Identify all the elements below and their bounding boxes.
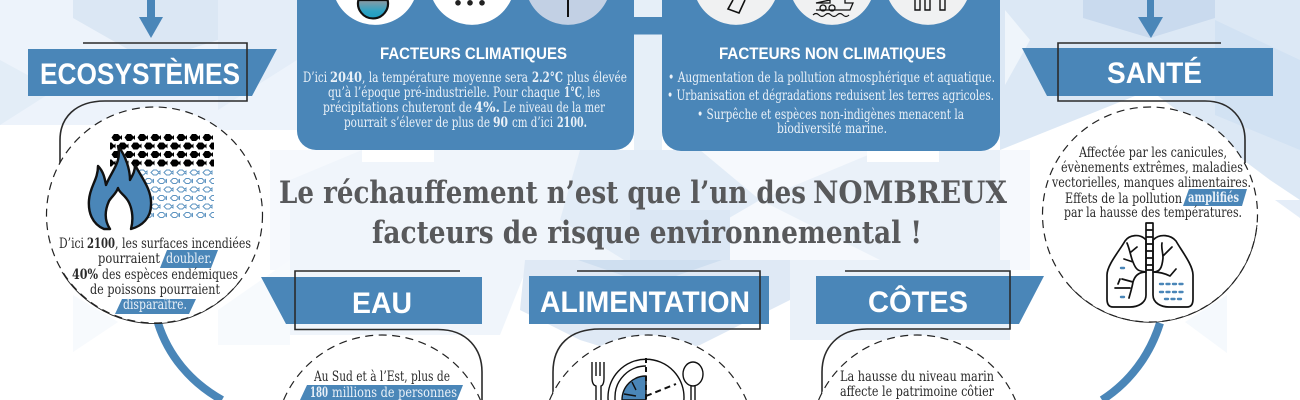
dashed circle (1042, 107, 1258, 322)
arrow: to ecosystems (139, 0, 163, 38)
panel: facteurs non climatiques (662, 0, 1000, 151)
text block: 40% (72, 267, 98, 283)
text block: non climate facts (667, 70, 995, 137)
text block: climate facts: Le niveau de la mer (503, 100, 605, 116)
text block: climate facts: 90 (493, 115, 508, 131)
text block: climate facts: pourrait s’élever de plus de (344, 115, 490, 131)
dashed circle (46, 107, 262, 324)
text block: climate facts: , la température moyenne sera (362, 70, 528, 86)
text block: Effets de la pollution (1065, 191, 1182, 207)
section: cotes (816, 271, 1044, 400)
text block: amplifiés (1188, 190, 1239, 206)
text block: par la hausse des températures. (1064, 205, 1242, 221)
text block: non climate facts: • Urbanisation et dégradations reduisent les terres agricoles. (667, 88, 994, 104)
text block: climate facts: 2100. (557, 115, 587, 131)
icon: fish pattern (110, 133, 214, 219)
banner title: SANTÉ (1107, 56, 1202, 90)
title: facteurs de risque environnemental ! (372, 215, 922, 251)
text block: climate facts: 2040 (330, 70, 362, 86)
icon: thermometer (529, 0, 607, 25)
text block: climate facts: , les (582, 85, 600, 101)
dashed circle (550, 335, 746, 400)
dashed circle (819, 335, 1015, 400)
text block: D’ici (59, 236, 85, 252)
text block: climate facts: cm d’ici (512, 115, 554, 131)
text block: climate facts: 1°C (564, 85, 582, 101)
heading: FACTEURS CLIMATIQUES (380, 45, 567, 63)
heading: FACTEURS NON CLIMATIQUES (719, 45, 946, 63)
icon: flame (89, 146, 151, 229)
text block: climate facts: plus élevée (567, 70, 627, 86)
text block (840, 369, 994, 400)
icon: plate clock with cutlery (592, 358, 703, 400)
text block: non climate facts: biodiversité marine. (777, 121, 887, 137)
icon: factory (889, 0, 967, 25)
text block: de poissons pourraient (90, 282, 220, 298)
banner outline (822, 271, 1010, 400)
section: alimentation (529, 271, 769, 400)
text block: Au Sud et à l’Est, plus de (313, 369, 450, 385)
icon: ship (793, 0, 871, 25)
banner (28, 49, 277, 96)
dashed circle (284, 335, 480, 400)
text block: non climate facts: • Surpêche et espèces non-indigènes menacent la (697, 107, 964, 123)
text block: climate facts: 4%. (474, 100, 500, 116)
title: NOMBREUX (813, 175, 1008, 211)
text block: vectorielles, manques alimentaires. (1051, 175, 1251, 191)
curved link: right (1102, 323, 1160, 400)
banner outline (60, 43, 247, 163)
banner title: EAU (352, 287, 412, 320)
banner (261, 277, 482, 324)
text block (300, 369, 463, 400)
text block (59, 236, 251, 314)
text block: climate facts: 2.2°C (532, 70, 563, 86)
banner title: ECOSYSTÈMES (40, 57, 240, 91)
text block: des espèces endémiques (102, 267, 238, 283)
icon: lungs (1107, 223, 1193, 307)
banner title: CÔTES (868, 285, 968, 319)
banner title: ALIMENTATION (540, 286, 750, 319)
section: eau (261, 271, 482, 400)
text block: pourraient (98, 251, 160, 267)
text block: disparaître. (123, 297, 187, 313)
panel: facteurs climatiques (297, 0, 634, 150)
arrow: to health (1138, 0, 1163, 38)
banner (816, 276, 1044, 324)
icon: water drop eye (336, 0, 414, 25)
text block (1051, 145, 1251, 221)
text block: La hausse du niveau marin (840, 369, 994, 385)
text block: non climate facts: • Augmentation de la pollution atmosphérique et aquatique. (668, 70, 995, 86)
title (279, 175, 1008, 251)
connector between panels (630, 17, 666, 34)
section: ecosystemes (28, 43, 277, 324)
text block: évènements extrêmes, maladies (1061, 160, 1243, 176)
text block: 2100 (87, 236, 115, 252)
title: Le réchauffement n’est que l’un des (279, 175, 806, 211)
banner outline (1058, 43, 1245, 163)
banner outline (295, 271, 482, 400)
text block: , les surfaces incendiées (115, 236, 251, 252)
text block: climate facts: qu’à l’époque pré-industrielle. Pour chaque (328, 85, 560, 101)
banner (1022, 48, 1273, 96)
icon: dots (433, 0, 511, 25)
section: sante (1022, 43, 1273, 322)
curved link: left (158, 323, 222, 400)
icon: phone (697, 0, 775, 25)
text block: climate facts (303, 70, 627, 131)
text block: doubler. (166, 251, 212, 267)
banner (529, 276, 769, 324)
text block: climate facts: D’ici (303, 70, 328, 86)
text block: climate facts: précipitations chuteront de (323, 100, 472, 116)
text block: Affectée par les canicules, (1078, 145, 1227, 161)
banner outline (553, 271, 760, 400)
text block: affecte le patrimoine côtier (840, 384, 994, 400)
